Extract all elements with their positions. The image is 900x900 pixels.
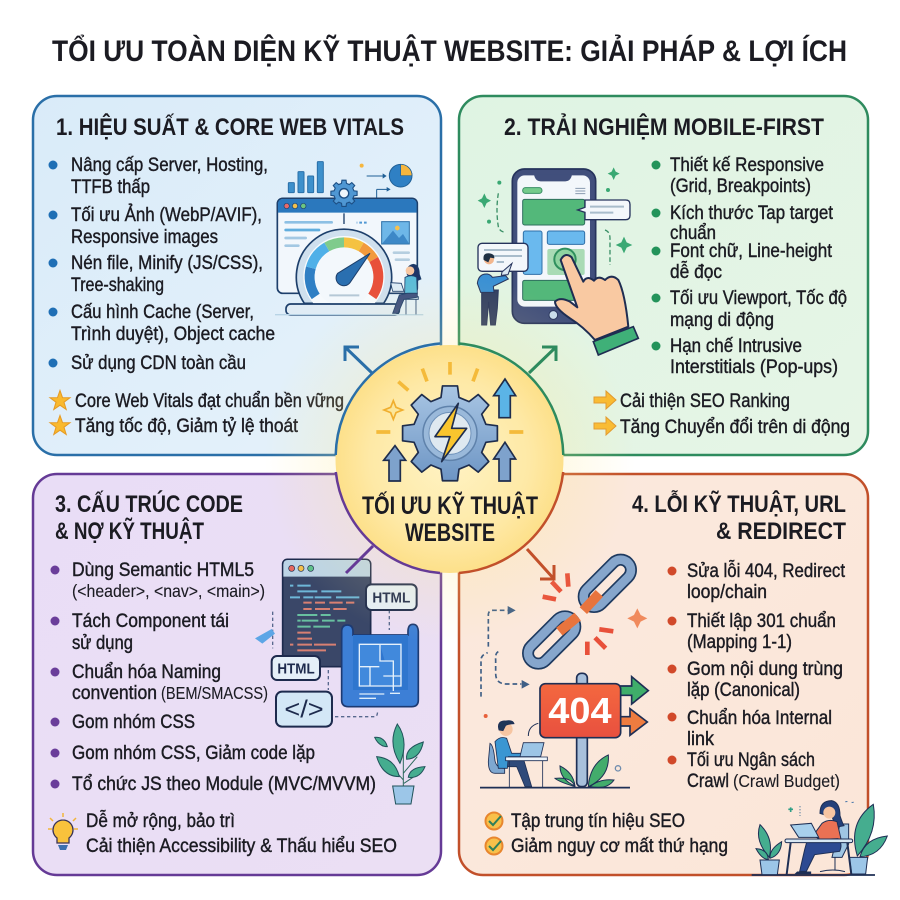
- icon: gear with lightning bolt and up arrows: [376, 362, 523, 481]
- bullet list: panel 1: Responsive images: [71, 226, 218, 248]
- bullet list: panel 3: (BEM/SMACSS): [161, 683, 268, 703]
- arrows from hub to panels: [345, 347, 556, 579]
- bullet list: panel 2: Interstitials (Pop-ups): [670, 356, 838, 378]
- benefits: panel 3: Cải thiện Accessibility & Thấu hiểu SEO: [86, 835, 397, 857]
- center hub label: TỐI ƯU KỸ THUẬT: [362, 490, 538, 520]
- bullet list: panel 1: Tối ưu Ảnh (WebP/AVIF),: [71, 203, 262, 226]
- benefits: panel 4: Tập trung tín hiệu SEO: [511, 810, 685, 832]
- illustration: code window, blueprint and html tags: [255, 559, 425, 804]
- center hub label: WEBSITE: [405, 519, 495, 547]
- bullet list: panel 2: [652, 154, 847, 378]
- bullet list: panel 4: loop/chain: [687, 581, 767, 603]
- icon: light bulb: [48, 813, 78, 850]
- bullet list: panel 1: [48, 154, 275, 374]
- bullet list: panel 3: [50, 559, 376, 795]
- bullet list: panel 3: sử dụng: [72, 632, 133, 654]
- panel: 1 performance and core web vitals: [33, 96, 441, 455]
- heading: panel 2: 2. TRẢI NGHIỆM MOBILE-FIRST: [504, 112, 824, 141]
- heading: panel 3: & NỢ KỸ THUẬT: [55, 517, 204, 545]
- bullet list: panel 4: Chuẩn hóa Internal: [687, 707, 832, 729]
- illustration: woman working at desk with plants: [752, 801, 887, 875]
- illustration: broken chain and 404 sign: 404: [548, 690, 612, 731]
- panel: 4 technical errors, url and redirect: [459, 474, 868, 875]
- bullet list: panel 4: Crawl: [687, 770, 729, 792]
- bullet list: panel 1: Sử dụng CDN toàn cầu: [71, 352, 246, 374]
- bullet list: panel 4: (Crawl Budget): [733, 771, 840, 791]
- bullet list: panel 3: convention: [72, 682, 157, 704]
- benefits: panel 1: [50, 390, 344, 437]
- bullet list: panel 4: link: [687, 728, 714, 750]
- panel: 2 mobile-first experience: [459, 96, 868, 455]
- center hub glow: [265, 274, 635, 644]
- bullet list: panel 4: Thiết lập 301 chuẩn: [687, 610, 836, 632]
- bullet list: panel 2: Tối ưu Viewport, Tốc độ: [670, 287, 847, 309]
- bullet list: panel 3: Gom nhóm CSS: [72, 711, 195, 733]
- bullet list: panel 2: Hạn chế Intrusive: [670, 335, 802, 357]
- benefits: panel 1: Tăng tốc độ, Giảm tỷ lệ thoát: [75, 415, 299, 437]
- benefits: panel 3: [48, 809, 397, 857]
- bullet list: panel 2: Font chữ, Line-height: [670, 240, 832, 262]
- illustration: speed gauge on browser window: [275, 162, 423, 315]
- heading: panel 4: 4. LỖI KỸ THUẬT, URL: [632, 489, 846, 518]
- heading: panel 4: & REDIRECT: [716, 518, 846, 545]
- bullet list: panel 3: Tổ chức JS theo Module (MVC/MVVM): [72, 773, 376, 795]
- bullet list: panel 4: (Mapping 1-1): [687, 631, 792, 653]
- illustration: code window, blueprint and html tags: HTML: [372, 591, 410, 607]
- bullet list: panel 2: chuẩn: [670, 222, 716, 244]
- heading: panel 3: 3. CẤU TRÚC CODE: [55, 490, 243, 518]
- bullet list: panel 3: Tách Component tái: [72, 610, 229, 632]
- bullet list: panel 1: Tree-shaking: [71, 274, 164, 296]
- bullet list: panel 2: Thiết kế Responsive: [670, 154, 824, 176]
- bullet list: panel 4: Gom nội dung trùng: [687, 658, 843, 680]
- illustration: code window, blueprint and html tags: HTML: [277, 662, 315, 678]
- bullet list: panel 1: Cấu hình Cache (Server,: [71, 301, 254, 323]
- icon: potted plant: [375, 724, 425, 804]
- bullet list: panel 2: dễ đọc: [670, 260, 722, 283]
- heading: panel 4: [632, 489, 846, 545]
- bullet list: panel 4: lặp (Canonical): [687, 679, 800, 701]
- heading: panel 1: 1. HIỆU SUẤT & CORE WEB VITALS: [56, 113, 404, 141]
- illustration: code window, blueprint and html tags: </>: [284, 695, 324, 723]
- bullet list: panel 1: Nâng cấp Server, Hosting,: [71, 154, 268, 176]
- bullet list: panel 2: (Grid, Breakpoints): [670, 175, 811, 197]
- center hub label: [362, 490, 538, 547]
- bullet list: panel 4: [668, 559, 845, 792]
- bullet list: panel 4: Tối ưu Ngân sách: [687, 749, 815, 771]
- benefits: panel 1: Core Web Vitals đạt chuẩn bền vững: [75, 390, 344, 412]
- bullet list: panel 2: Kích thước Tap target: [670, 202, 834, 224]
- benefits: panel 2: Tăng Chuyển đổi trên di động: [620, 416, 850, 438]
- bullet list: panel 4: Sửa lỗi 404, Redirect: [687, 559, 845, 582]
- bullet list: panel 1: TTFB thấp: [71, 176, 150, 198]
- illustration: phone with tapping hand: [477, 167, 638, 355]
- bullet list: panel 3: (<header>, <nav>, <main>): [72, 581, 265, 601]
- bullet list: panel 3: Chuẩn hóa Naming: [72, 661, 221, 683]
- benefits: panel 3: Dễ mở rộng, bảo trì: [86, 809, 235, 832]
- bullet list: panel 3: Dùng Semantic HTML5: [72, 559, 254, 581]
- bullet list: panel 1: Trình duyệt), Object cache: [71, 323, 275, 345]
- bullet list: panel 3: Gom nhóm CSS, Giảm code lặp: [72, 742, 315, 764]
- panel: 3 code structure and technical debt: [33, 474, 441, 875]
- heading: panel 3: [55, 490, 243, 545]
- center hub: gear circle: [336, 344, 564, 579]
- bullet list: panel 1: Nén file, Minify (JS/CSS),: [71, 252, 263, 274]
- illustration: broken chain and 404 sign: [480, 555, 648, 788]
- benefits: panel 2: Cải thiện SEO Ranking: [620, 390, 790, 412]
- benefits: panel 2: [594, 390, 850, 438]
- benefits: panel 4: Giảm nguy cơ mất thứ hạng: [511, 835, 728, 857]
- bullet list: panel 2: mạng di động: [670, 309, 774, 331]
- benefits: panel 4: [486, 810, 728, 857]
